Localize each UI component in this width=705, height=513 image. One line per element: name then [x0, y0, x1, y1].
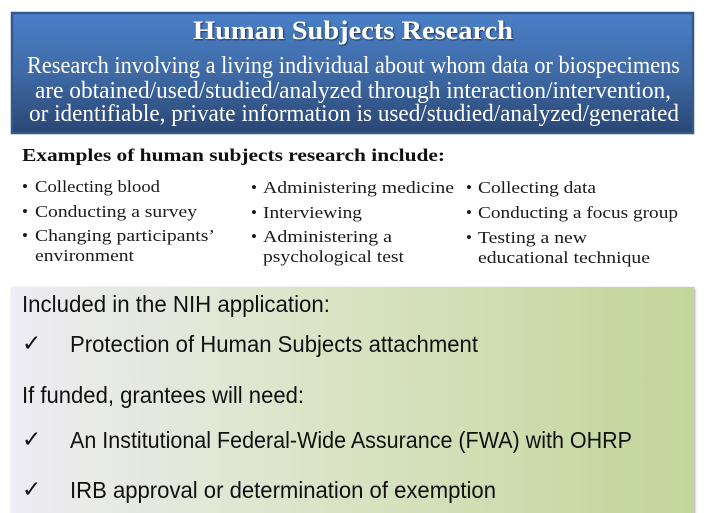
item: protection attachment: Protection of Human Subjects attachment [70, 331, 479, 357]
list: examples column 3: • [466, 178, 472, 197]
list: examples column 2: psychological test [263, 247, 404, 266]
item: IRB: ✓ [22, 477, 41, 503]
list: examples column 1: environment [35, 246, 134, 265]
item: protection attachment: ✓ [22, 331, 41, 357]
definition text [27, 53, 680, 127]
list: examples column 2: Administering medicine [263, 178, 454, 197]
list: examples column 3 [466, 178, 678, 267]
item: IRB: IRB approval or determination of exemption [70, 477, 496, 503]
list: examples column 3: educational technique [478, 248, 650, 267]
list: examples column 2: Administering a [263, 227, 393, 246]
heading: examples: Examples of human subjects research include: [22, 145, 445, 165]
list: examples column 3: • [466, 228, 472, 247]
list: examples column 1: Conducting a survey [35, 202, 198, 221]
list: examples column 1 [22, 177, 215, 265]
definition text: or identifiable, private information is used/studied/analyzed/generated [29, 101, 679, 127]
list: examples column 1: Changing participants’ [35, 226, 215, 245]
list: examples column 1: • [22, 177, 28, 196]
definition text: are obtained/used/studied/analyzed through interaction/intervention, [35, 78, 671, 104]
list: examples column 1: • [22, 202, 28, 221]
list: examples column 2 [251, 178, 454, 266]
list: examples column 3: Collecting data [478, 178, 597, 197]
list: examples column 2: • [251, 227, 257, 246]
heading: included in application: Included in the NIH application: [22, 291, 330, 317]
list: examples column 3: Conducting a focus group [478, 203, 678, 222]
item: FWA: ✓ [22, 427, 41, 453]
item: FWA: An Institutional Federal-Wide Assurance (FWA) with OHRP [70, 427, 632, 453]
list: examples column 1: Collecting blood [35, 177, 161, 196]
heading: if funded: If funded, grantees will need: [22, 382, 304, 408]
list: examples column 2: Interviewing [263, 203, 363, 222]
list: examples column 3: Testing a new [478, 228, 588, 247]
title: Human Subjects Research [193, 16, 514, 45]
list: examples column 3: • [466, 203, 472, 222]
panel: NIH requirements [11, 287, 694, 513]
list: examples column 2: • [251, 178, 257, 197]
list: examples column 2: • [251, 203, 257, 222]
panel: header definition [12, 13, 693, 133]
list: examples column 1: • [22, 226, 28, 245]
